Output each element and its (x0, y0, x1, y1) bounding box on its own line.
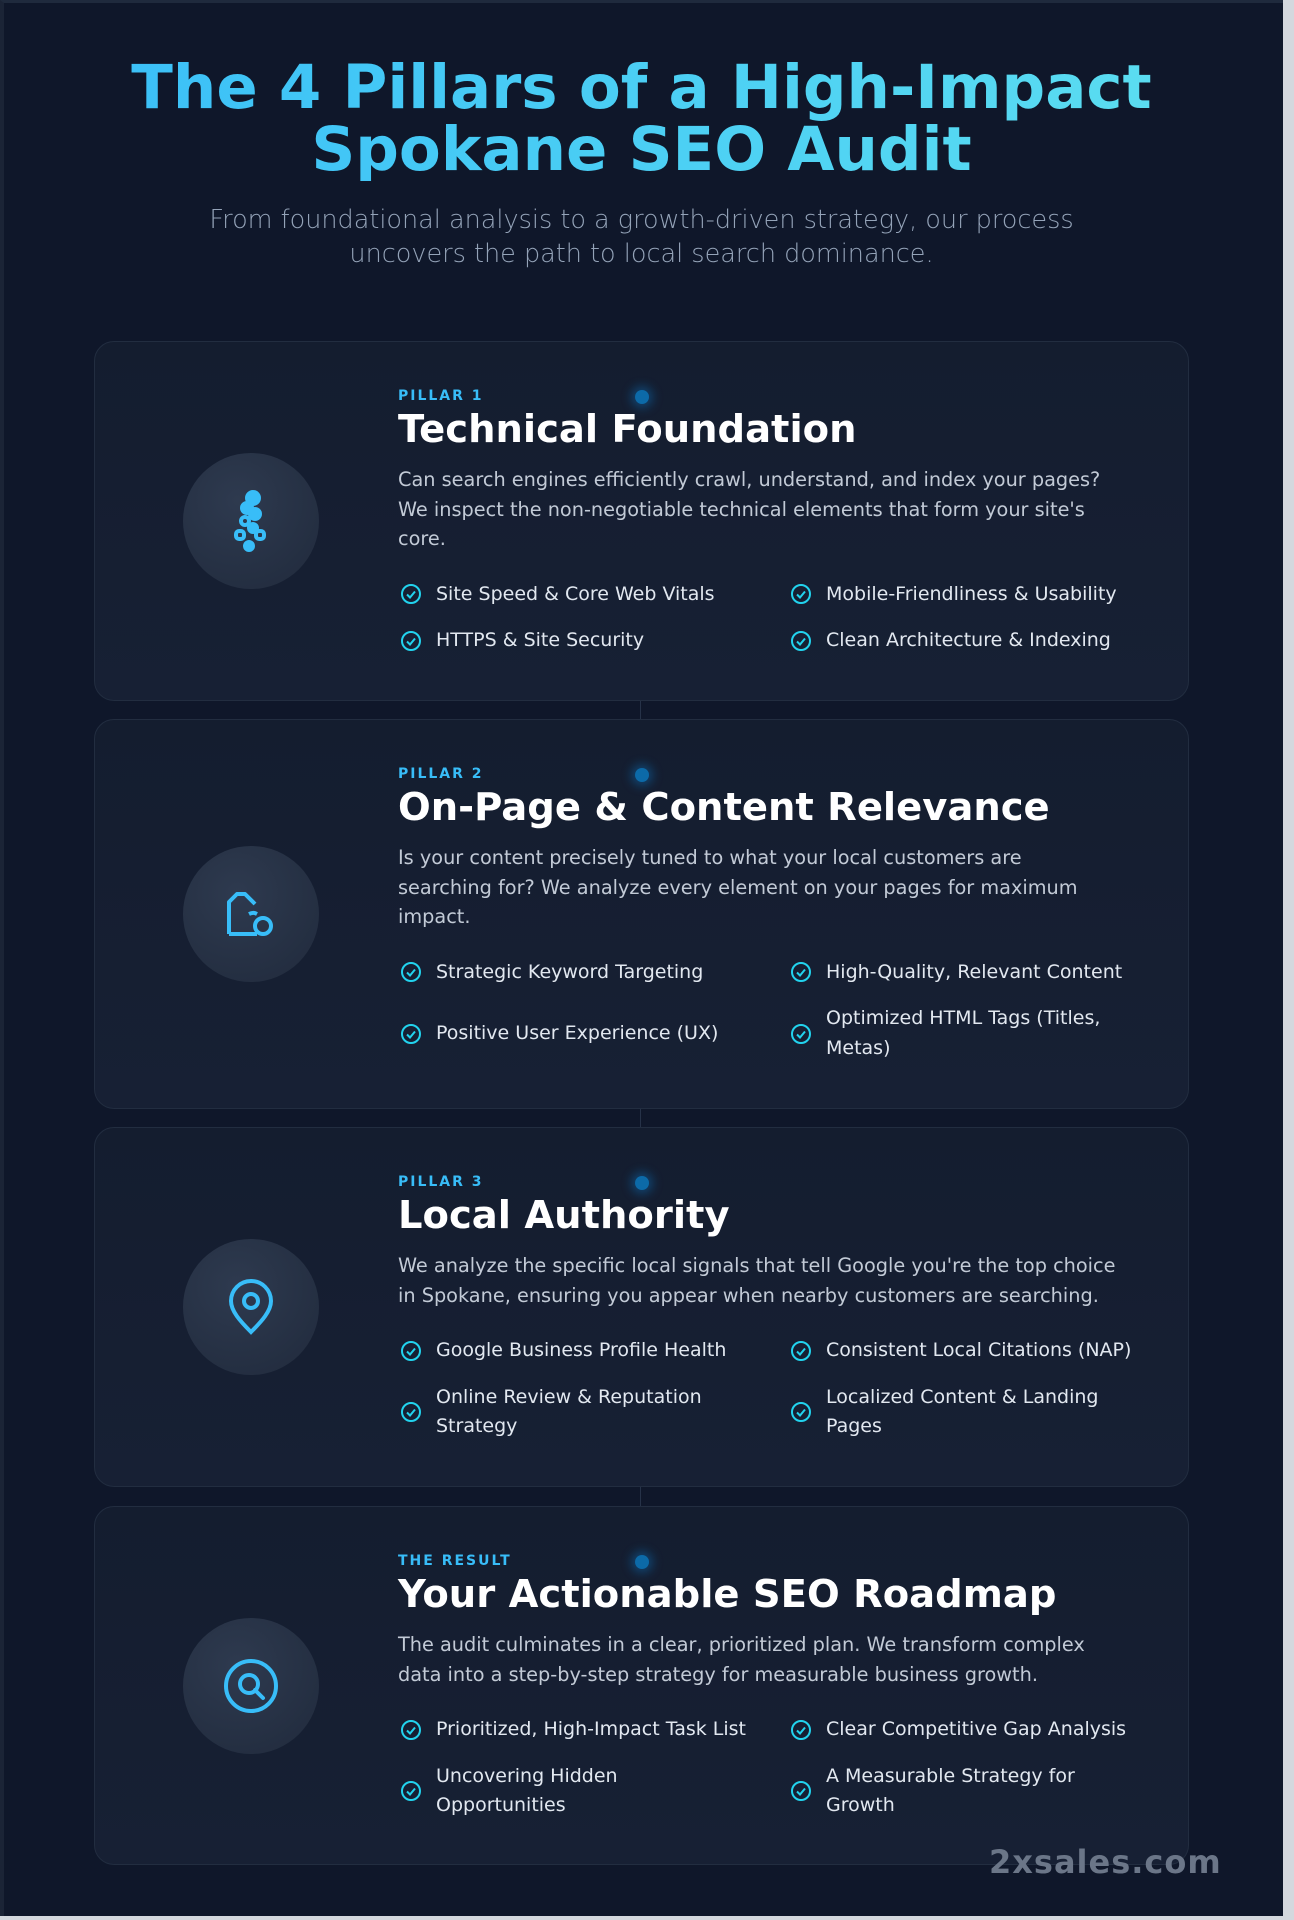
checklist (401, 960, 1122, 1058)
heading: Your Actionable SEO Roadmap (398, 1572, 1056, 1617)
checklist: Google Business Profile Health (436, 1339, 726, 1361)
heading: Technical Foundation (398, 407, 857, 452)
label: PILLAR 3 (398, 1174, 484, 1190)
checklist: High-Quality, Relevant Content (826, 960, 1122, 982)
description (398, 1633, 1085, 1686)
description: Can search engines efficiently crawl, understand, and index your pages? (398, 468, 1100, 491)
description: We analyze the specific local signals that tell Google you're the top choice (398, 1254, 1116, 1277)
panel: result (94, 1506, 1189, 1865)
checklist: Site Speed & Core Web Vitals (436, 582, 715, 604)
description: searching for? We analyze every element on your pages for maximum (398, 876, 1078, 898)
checklist: Strategy (436, 1415, 517, 1437)
checklist: HTTPS & Site Security (436, 629, 644, 651)
panel: pillar 1 (94, 341, 1189, 701)
heading: On-Page & Content Relevance (398, 785, 1050, 830)
panel: pillar 3 (94, 1127, 1189, 1487)
description: Is your content precisely tuned to what your local customers are (398, 846, 1022, 869)
checklist: A Measurable Strategy for (826, 1764, 1075, 1786)
checklist: Pages (826, 1415, 882, 1437)
description: data into a step-by-step strategy for measurable business growth. (398, 1662, 1038, 1686)
checklist: Online Review & Reputation (436, 1386, 702, 1408)
checklist: Growth (826, 1794, 895, 1816)
checklist: Clear Competitive Gap Analysis (826, 1718, 1126, 1740)
checklist: Prioritized, High-Impact Task List (436, 1718, 746, 1740)
checklist: Mobile-Friendliness & Usability (826, 582, 1117, 604)
checklist: Opportunities (436, 1794, 566, 1816)
description: impact. (398, 905, 470, 928)
checklist: Consistent Local Citations (NAP) (826, 1339, 1131, 1361)
heading: Local Authority (398, 1193, 730, 1238)
description: We inspect the non-negotiable technical elements that form your site's (398, 498, 1085, 520)
checklist: Positive User Experience (UX) (436, 1022, 718, 1044)
checklist: Clean Architecture & Indexing (826, 629, 1111, 651)
title (0, 57, 1283, 181)
icon: magnifier (183, 1618, 319, 1754)
icon: map pin (183, 1239, 319, 1375)
checklist: Localized Content & Landing (826, 1386, 1098, 1408)
watermark: 2xsales.com (989, 1843, 1222, 1881)
checklist: Metas) (826, 1036, 890, 1058)
checklist (401, 1339, 1131, 1437)
label: PILLAR 1 (398, 388, 484, 404)
description: core. (398, 527, 446, 550)
title: The 4 Pillars of a High-Impact (131, 52, 1152, 123)
description (398, 846, 1078, 928)
icon: technical (183, 453, 319, 589)
panel: pillar 2 (94, 719, 1189, 1109)
description: The audit culminates in a clear, prioritized plan. We transform complex (398, 1633, 1085, 1656)
description (398, 468, 1100, 550)
checklist: Optimized HTML Tags (Titles, (826, 1007, 1100, 1029)
description: in Spokane, ensuring you appear when nearby customers are searching. (398, 1284, 1099, 1306)
icon: content (183, 846, 319, 982)
checklist: Uncovering Hidden (436, 1764, 618, 1786)
title: Spokane SEO Audit (311, 114, 972, 185)
checklist: Strategic Keyword Targeting (436, 960, 703, 982)
label: PILLAR 2 (398, 766, 484, 782)
checklist (401, 582, 1117, 651)
subtitle: From foundational analysis to a growth-driven strategy, our process (209, 205, 1074, 235)
label: THE RESULT (398, 1553, 512, 1569)
subtitle (209, 205, 1074, 269)
subtitle: uncovers the path to local search dominance. (349, 239, 934, 269)
description (398, 1254, 1116, 1306)
checklist (401, 1718, 1126, 1816)
